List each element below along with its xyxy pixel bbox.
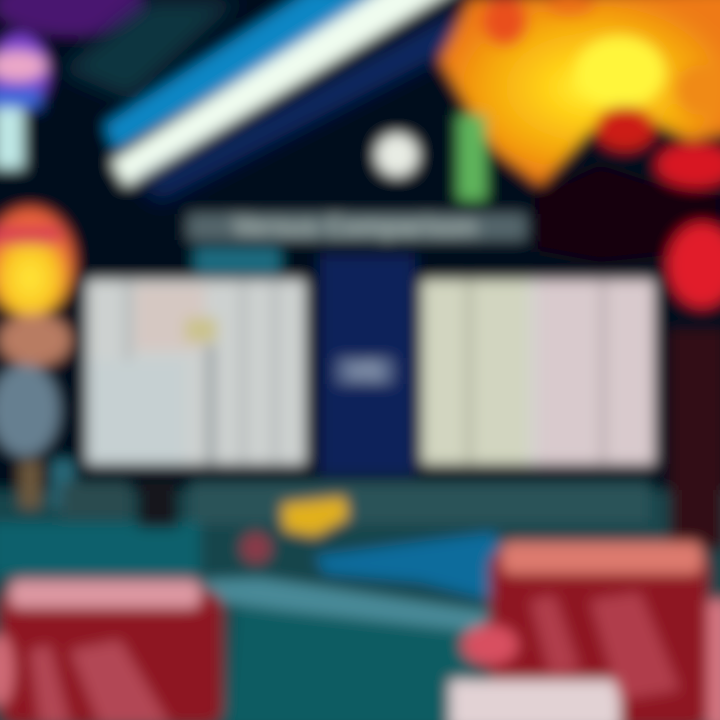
striped ball — [0, 208, 74, 508]
rainbow decoration — [0, 34, 48, 168]
blue bar — [315, 532, 505, 600]
right dark figure — [670, 330, 720, 550]
right panel accent — [422, 280, 528, 464]
explosion — [440, 0, 720, 307]
icon: white circle — [376, 134, 418, 176]
dice: bottom right — [450, 542, 720, 720]
panel: left — [87, 280, 305, 464]
left panel accent — [135, 285, 205, 350]
floor band — [0, 480, 650, 720]
yellow badge — [282, 497, 348, 536]
versus label: VS — [349, 358, 381, 385]
small red marker — [241, 533, 271, 563]
panel: right — [422, 280, 654, 464]
dice: bottom left — [0, 580, 222, 720]
versus label — [337, 358, 393, 385]
title: Versus Comparison — [233, 211, 477, 241]
light beam — [105, 0, 460, 200]
